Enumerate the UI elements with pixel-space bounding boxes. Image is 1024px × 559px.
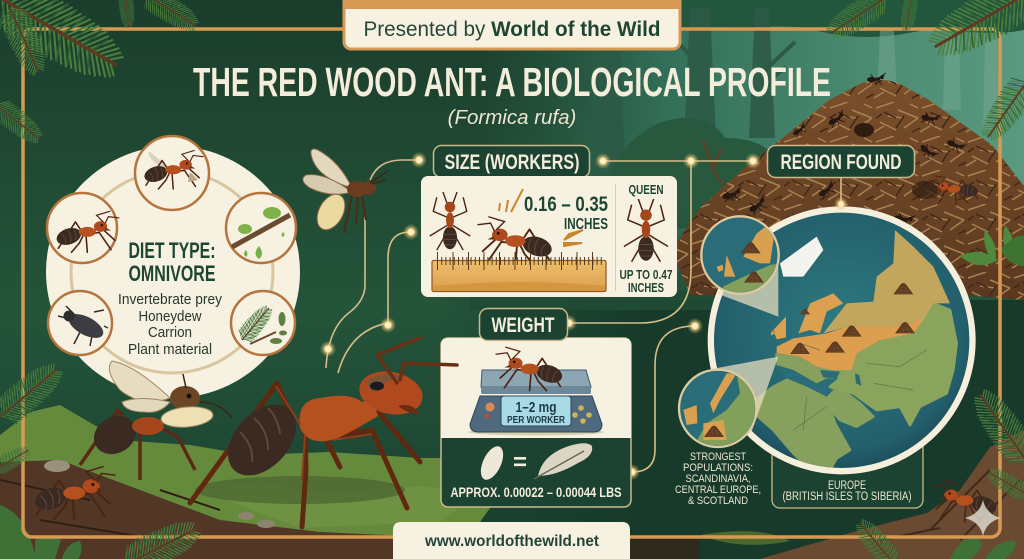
icon: beetle	[48, 291, 112, 355]
diet heading: OMNIVORE	[128, 261, 216, 286]
country borders	[793, 343, 927, 430]
scale reading: PER WORKER	[507, 414, 565, 426]
label: region found: REGION FOUND	[780, 150, 902, 174]
diet list: Honeydew	[138, 309, 202, 325]
panel: diet	[46, 136, 300, 398]
red ant on mound	[928, 170, 981, 208]
small ant bottom right	[932, 479, 998, 521]
globe map	[679, 206, 976, 474]
southern europe	[775, 353, 852, 383]
queen size: UP TO 0.47	[620, 268, 673, 282]
ant side view	[478, 217, 554, 265]
connector lines	[320, 152, 761, 480]
strongest populations text: POPULATIONS:	[683, 462, 753, 474]
icon: feather	[534, 443, 592, 479]
callout: europe box: EUROPE	[828, 480, 866, 492]
subtitle: (Formica rufa)	[448, 106, 576, 129]
scandinavia	[798, 293, 843, 333]
strongest populations text: CENTRAL EUROPE,	[675, 484, 761, 496]
central europe band	[777, 320, 923, 370]
diet heading: DIET TYPE:	[128, 238, 216, 263]
mound markers	[790, 283, 915, 354]
scale reading: 1–2 mg	[516, 400, 556, 416]
dark lower right background	[440, 300, 1024, 559]
inset: central europe	[679, 370, 760, 447]
diet list: Plant material	[128, 342, 212, 358]
northern russia	[823, 230, 950, 333]
africa and arabia	[747, 378, 873, 470]
icon: plant material	[231, 291, 295, 355]
queen ant	[624, 199, 668, 262]
forest scene	[470, 0, 1024, 310]
right side foliage	[960, 225, 1024, 266]
equals sign: =	[513, 449, 527, 476]
icon: worker ant	[47, 193, 119, 263]
label: size	[434, 146, 590, 178]
diet list: Invertebrate prey	[118, 292, 223, 308]
queen size: INCHES	[628, 281, 664, 295]
icon: rice grain	[476, 443, 508, 483]
icon: aphids and honeydew	[226, 193, 296, 263]
zoom cones	[715, 257, 778, 432]
label: region found	[768, 146, 914, 178]
panel: size	[421, 176, 677, 297]
seas	[787, 370, 862, 397]
footer url box	[393, 522, 630, 559]
footer url box: www.worldofthewild.net	[424, 533, 599, 550]
top banner	[344, 0, 680, 49]
label: weight	[480, 308, 568, 340]
label: size: SIZE (WORKERS)	[444, 150, 580, 174]
iceland and greenland	[780, 237, 823, 277]
icon: ant with prey	[135, 136, 209, 210]
ant on scale	[496, 347, 564, 391]
queen label: QUEEN	[628, 182, 664, 197]
size range: 0.16 – 0.35	[524, 192, 608, 216]
weight note: APPROX. 0.00022 – 0.00044 LBS	[450, 485, 622, 500]
asia	[830, 303, 957, 425]
flying queen ant	[303, 149, 388, 234]
ant mound	[672, 73, 1024, 300]
label: weight: WEIGHT	[492, 313, 554, 337]
strongest populations text: STRONGEST	[690, 451, 746, 463]
small ant on log	[32, 467, 115, 519]
diet list: Carrion	[148, 325, 192, 341]
ruler	[432, 260, 606, 292]
tree root bottom right	[760, 430, 1024, 559]
divider	[614, 184, 616, 291]
panel: weight	[441, 338, 631, 507]
speed marks	[499, 189, 583, 246]
large red wood ant	[190, 338, 457, 527]
british isles	[771, 317, 786, 339]
inset: british isles and scandinavia	[701, 216, 780, 297]
scale	[468, 370, 604, 436]
sparkle mark	[965, 500, 1001, 536]
callout: europe box: (BRITISH ISLES TO SIBERIA)	[782, 491, 912, 503]
globe connector	[834, 178, 848, 211]
top banner: Presented by World of the Wild	[364, 18, 660, 41]
strongest populations text: & SCOTLAND	[688, 495, 748, 507]
ground and log	[0, 405, 790, 559]
winged ant carrying larva	[80, 361, 232, 480]
callout: europe box	[772, 440, 923, 508]
strongest populations text: SCANDINAVIA,	[686, 473, 750, 485]
inches: INCHES	[564, 216, 608, 233]
ant top view	[430, 192, 470, 250]
